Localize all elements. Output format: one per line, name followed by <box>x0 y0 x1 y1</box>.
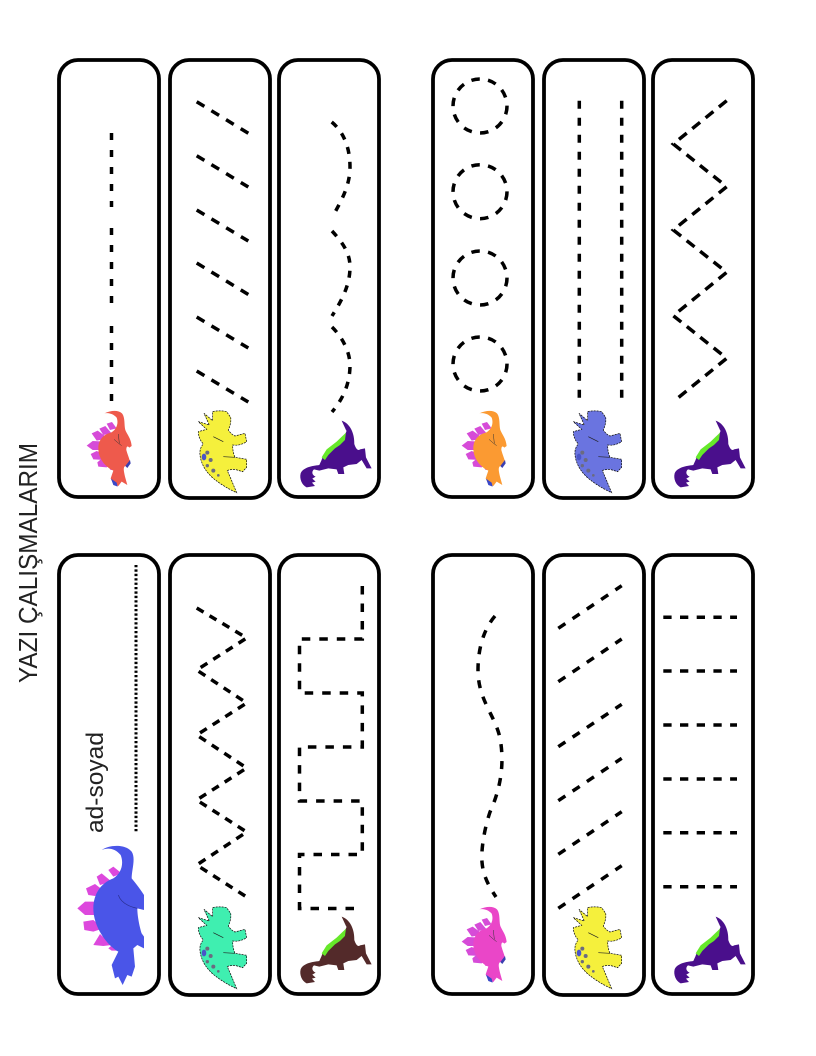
tracing line <box>197 608 247 897</box>
tracing circles <box>453 79 507 391</box>
icon: purple rex <box>674 421 746 487</box>
icon: big blue stegosaurus <box>77 846 144 985</box>
panel: double vertical tracing lines with blue dinosaur <box>544 60 644 498</box>
panel: wavy tracing line with purple dinosaur <box>279 60 379 497</box>
icon: yellow triceratops <box>573 907 622 989</box>
panel: name line with big blue dinosaur <box>59 555 159 994</box>
tracing line <box>673 101 727 402</box>
tracing lines <box>663 617 737 887</box>
icon: brown rex <box>300 917 372 983</box>
tracing line <box>332 122 350 412</box>
panel: zigzag tracing line with purple dinosaur <box>653 60 753 497</box>
icon: mint triceratops <box>198 907 247 989</box>
icon: yellow triceratops <box>198 411 247 493</box>
tracing lines <box>197 102 248 402</box>
icon: purple rex <box>674 917 746 983</box>
dotted name line <box>134 565 138 833</box>
icon: blue triceratops <box>573 411 622 493</box>
tracing line <box>478 616 502 897</box>
title: YAZI ÇALIŞMALARIM <box>13 443 43 683</box>
tracing lines <box>579 101 622 402</box>
panel: square wave tracing line with brown dinosaur <box>279 555 379 994</box>
icon: orange stegosaurus <box>462 411 507 487</box>
panel: circles tracing with orange dinosaur <box>433 60 533 497</box>
panel: zigzag tracing line with mint dinosaur <box>170 555 270 995</box>
panel: wavy tracing line with pink dinosaur <box>433 555 533 994</box>
panel: straight vertical tracing line with red dinosaur <box>59 60 159 497</box>
panel: diagonal tracing lines with yellow dinosaur <box>170 60 270 498</box>
icon: purple rex <box>300 421 372 487</box>
icon: red stegosaurus <box>87 411 132 487</box>
panel: horizontal tracing lines with purple dinosaur <box>653 555 753 994</box>
tracing line <box>110 133 113 404</box>
tracing line <box>300 586 363 908</box>
tracing lines <box>558 586 622 908</box>
label: ad-soyad: ad-soyad <box>82 732 109 833</box>
panel: rising diagonal tracing lines with yellow dinosaur <box>544 555 644 995</box>
icon: pink stegosaurus <box>462 907 507 983</box>
